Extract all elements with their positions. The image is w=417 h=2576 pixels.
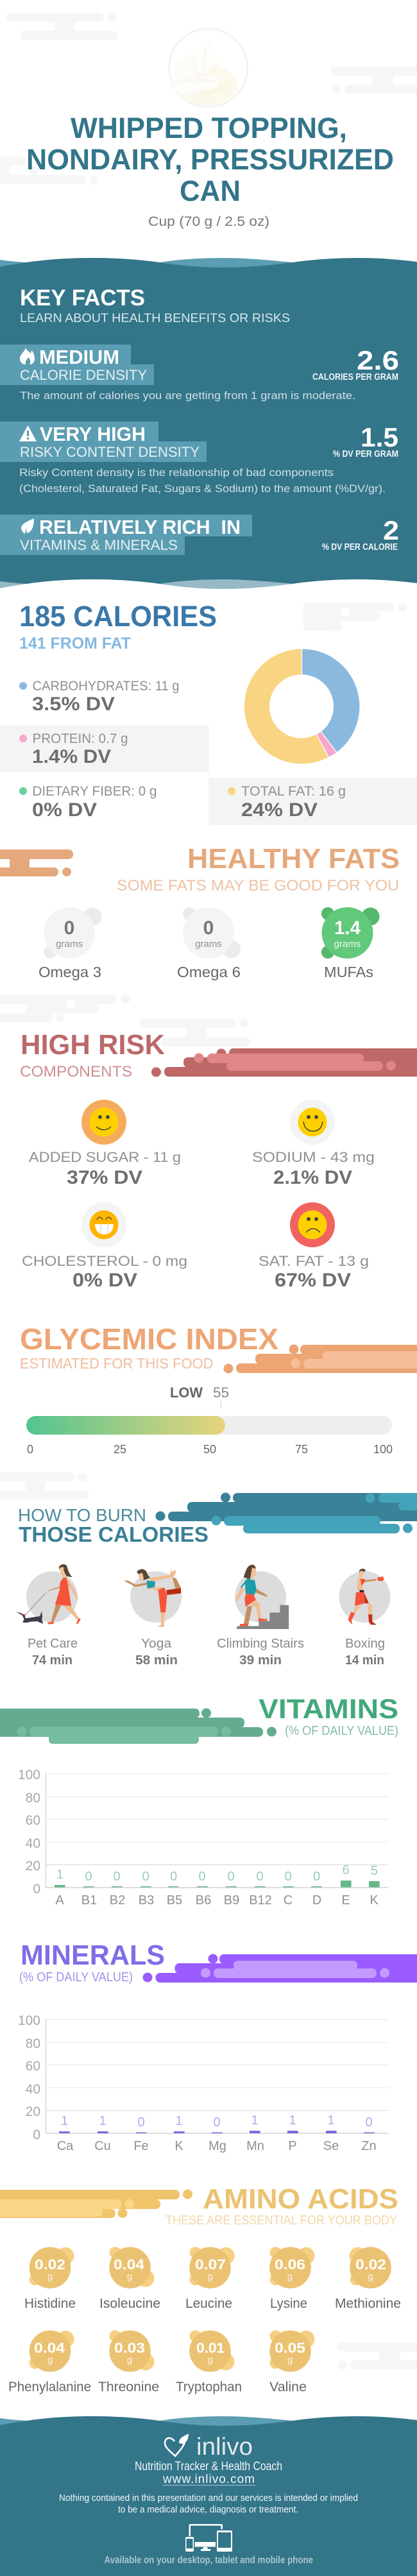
risk: saturated fat xyxy=(259,1202,369,1291)
chart: vitamins: 40 xyxy=(26,1836,40,1851)
chart: vitamins: E xyxy=(341,1893,350,1907)
chart: minerals: 40 xyxy=(26,2082,40,2097)
stat: omega 6 xyxy=(177,907,241,980)
chart: glycemic index gauge xyxy=(26,1385,393,1456)
vitamins heading: VITAMINS xyxy=(259,1694,398,1725)
amino: valine: 0.05 xyxy=(275,2340,305,2356)
chart: vitamins: C xyxy=(284,1893,293,1907)
risk: sodium: 2.1% DV xyxy=(273,1167,352,1188)
fact: risky content density: RISKY CONTENT DENSITY xyxy=(20,444,200,460)
chart: minerals: Fe xyxy=(133,2139,149,2153)
chart: glycemic index gauge: LOW xyxy=(170,1385,203,1401)
chart: minerals: P xyxy=(288,2139,297,2153)
chart: minerals: 1 xyxy=(175,2114,183,2128)
chart: macronutrient donut xyxy=(244,649,360,764)
amino: valine xyxy=(269,2330,314,2394)
serving size: Cup (70 g / 2.5 oz) xyxy=(148,214,269,229)
chart: minerals: 1 xyxy=(327,2113,335,2128)
amino: tryptophan: 0.01 xyxy=(196,2340,225,2356)
chart: vitamins: 80 xyxy=(26,1791,40,1805)
chart: glycemic index gauge: 100 xyxy=(373,1443,393,1456)
legend: carbohydrates: 3.5% DV xyxy=(32,694,115,715)
amino: methionine: g xyxy=(368,2271,373,2282)
chart: minerals: Cu xyxy=(94,2139,111,2153)
fact: calorie density: MEDIUM xyxy=(39,346,119,368)
high risk heading: HIGH RISK xyxy=(21,1029,165,1061)
activity: boxing: Boxing xyxy=(345,1637,385,1651)
activity: climbing stairs xyxy=(217,1565,304,1668)
chart: vitamins: 0 xyxy=(113,1870,121,1884)
amino: threonine: 0.03 xyxy=(114,2340,145,2356)
fact: vitamins and minerals: 2 xyxy=(383,515,399,545)
high risk subheading: COMPONENTS xyxy=(20,1063,132,1080)
fact: calorie density: CALORIES PER GRAM xyxy=(312,372,398,382)
legend: dietary fiber xyxy=(19,784,157,821)
glycemic index subheading: ESTIMATED FOR THIS FOOD xyxy=(20,1355,213,1372)
fact: calorie density: The amount of calories you are getting from 1 gram is moderate. xyxy=(20,389,355,402)
icon: devices xyxy=(185,2524,232,2552)
chart: vitamins: B12 xyxy=(249,1893,272,1907)
key facts heading: KEY FACTS xyxy=(20,286,145,311)
amino: tryptophan xyxy=(176,2330,242,2394)
disclaimer: to be a medical advice, diagnosis or treatment. xyxy=(118,2504,298,2515)
tagline: Nutrition Tracker & Health Coach xyxy=(135,2459,282,2473)
amino: phenylalanine: 0.04 xyxy=(34,2340,65,2356)
amino: threonine: Threonine xyxy=(98,2380,159,2394)
chart: vitamins: 1 xyxy=(56,1868,64,1882)
minerals heading: MINERALS xyxy=(21,1940,165,1971)
chart: minerals: 20 xyxy=(26,2104,40,2119)
stat: omega 3: 0 xyxy=(64,917,74,939)
calories heading: 185 CALORIES xyxy=(19,600,217,633)
title: NONDAIRY, PRESSURIZED xyxy=(26,143,394,176)
amino: phenylalanine: Phenylalanine xyxy=(8,2380,91,2394)
fact: vitamins and minerals: VITAMINS & MINERALS xyxy=(20,537,178,553)
glycemic index heading: GLYCEMIC INDEX xyxy=(20,1322,278,1356)
fact: calorie density: 2.6 xyxy=(357,345,399,375)
amino: leucine: 0.07 xyxy=(195,2256,226,2273)
fact: risky content density: Risky Content density is the relationship of bad components xyxy=(19,466,334,479)
stat: MUFAs: MUFAs xyxy=(324,964,373,980)
icon: woman climbing stairs xyxy=(235,1565,289,1629)
stat: MUFAs xyxy=(321,907,380,980)
activity: pet care: 74 min xyxy=(32,1653,72,1668)
vitamins subheading: (% OF DAILY VALUE) xyxy=(285,1724,398,1738)
amino: leucine: g xyxy=(207,2271,213,2282)
chart: vitamins: 20 xyxy=(26,1859,40,1873)
amino: leucine: Leucine xyxy=(185,2296,232,2311)
chart: minerals xyxy=(18,2013,389,2153)
activity: pet care xyxy=(17,1564,81,1668)
chart: vitamins: B2 xyxy=(110,1893,125,1907)
chart: vitamins: 0 xyxy=(256,1870,264,1884)
amino: phenylalanine xyxy=(8,2330,91,2394)
chart: vitamins: B1 xyxy=(81,1893,97,1907)
chart: minerals: 0 xyxy=(213,2115,221,2129)
chart: minerals: 0 xyxy=(137,2115,145,2129)
website link: www.inlivo.com xyxy=(162,2473,255,2486)
stat: omega 3 xyxy=(38,907,101,980)
amino: isoleucine: 0.04 xyxy=(114,2256,145,2273)
activity: boxing: 14 min xyxy=(345,1653,384,1668)
chart: minerals: Se xyxy=(323,2139,339,2153)
amino: lysine: 0.06 xyxy=(275,2256,305,2273)
legend: carbohydrates: CARBOHYDRATES: 11 g xyxy=(32,679,180,694)
chart: vitamins: 0 xyxy=(227,1870,235,1884)
stat: omega 6: Omega 6 xyxy=(177,964,241,980)
activity: pet care: Pet Care xyxy=(28,1637,78,1651)
minerals subheading: (% OF DAILY VALUE) xyxy=(19,1970,133,1984)
legend: carbohydrates xyxy=(19,679,180,715)
icon: woman in yoga pose xyxy=(124,1569,181,1627)
icon: whipped cream photo xyxy=(169,28,248,107)
amino: valine: Valine xyxy=(269,2380,307,2394)
minerals banner xyxy=(142,1954,417,1983)
fact: calorie density: CALORIE DENSITY xyxy=(20,367,147,383)
chart: vitamins: 0 xyxy=(142,1870,149,1884)
burn calories banner xyxy=(155,1492,417,1533)
risk: added sugar: ADDED SUGAR - 11 g xyxy=(29,1149,181,1165)
chart: vitamins xyxy=(18,1768,389,1907)
fact: risky content density xyxy=(0,422,398,495)
risk: saturated fat: SAT. FAT - 13 g xyxy=(259,1253,369,1269)
stat: MUFAs: grams xyxy=(334,939,361,950)
stat: omega 3: Omega 3 xyxy=(38,964,101,980)
fact: risky content density: VERY HIGH xyxy=(40,423,146,445)
chart: vitamins: 0 xyxy=(170,1870,177,1884)
chart: glycemic index gauge: 0 xyxy=(27,1443,33,1456)
chart: vitamins: 0 xyxy=(284,1870,292,1884)
chart: minerals: 60 xyxy=(26,2059,40,2074)
icon: leaf xyxy=(21,518,34,534)
fact: risky content density: 1.5 xyxy=(361,422,398,452)
chart: vitamins: 0 xyxy=(33,1882,40,1897)
chart: vitamins: 0 xyxy=(198,1870,206,1884)
chart: minerals: 80 xyxy=(26,2036,40,2051)
amino: methionine: Methionine xyxy=(335,2296,401,2311)
fact: calorie density xyxy=(0,345,399,402)
availability note: Available on your desktop, tablet and mobile phone xyxy=(104,2555,313,2566)
stat: omega 3: grams xyxy=(56,939,83,950)
activity: yoga: 58 min xyxy=(135,1653,178,1668)
amino: histidine: g xyxy=(47,2271,53,2282)
chart: vitamins: 5 xyxy=(371,1864,378,1878)
chart: glycemic index gauge: 55 xyxy=(213,1385,229,1401)
high risk banner xyxy=(151,1048,417,1077)
panel: footer xyxy=(0,2416,417,2576)
legend: protein: 1.4% DV xyxy=(32,746,111,767)
vitamins banner xyxy=(0,1708,277,1744)
amino: threonine xyxy=(98,2330,159,2394)
chart: vitamins: 0 xyxy=(313,1870,320,1884)
healthy fats subheading: SOME FATS MAY BE GOOD FOR YOU xyxy=(117,877,399,894)
chart: glycemic index gauge: 75 xyxy=(295,1443,308,1456)
legend: dietary fiber: DIETARY FIBER: 0 g xyxy=(32,784,157,799)
chart: vitamins: K xyxy=(370,1893,379,1907)
amino: tryptophan: g xyxy=(207,2355,213,2366)
legend: protein: PROTEIN: 0.7 g xyxy=(32,731,128,746)
icon: inlivo heart logo xyxy=(165,2434,189,2456)
legend: total fat: 24% DV xyxy=(241,799,318,821)
amino: isoleucine: Isoleucine xyxy=(99,2296,160,2311)
key facts subheading: LEARN ABOUT HEALTH BENEFITS OR RISKS xyxy=(20,311,290,325)
risk: sodium xyxy=(252,1100,375,1188)
activity: climbing stairs: Climbing Stairs xyxy=(217,1637,304,1651)
amino: leucine xyxy=(185,2247,235,2311)
chart: minerals: Mn xyxy=(246,2139,264,2153)
amino: histidine xyxy=(24,2247,76,2311)
chart: vitamins: 0 xyxy=(85,1870,92,1884)
glycemic index banner xyxy=(223,1345,417,1373)
legend: dietary fiber: 0% DV xyxy=(32,799,97,821)
activity: yoga: Yoga xyxy=(141,1637,172,1651)
fact: vitamins and minerals: % DV PER CALORIE xyxy=(322,542,398,552)
burn calories heading line 2: THOSE CALORIES xyxy=(19,1523,208,1546)
legend: protein xyxy=(0,725,209,772)
chart: minerals: 1 xyxy=(61,2114,68,2128)
chart: glycemic index gauge: 50 xyxy=(203,1443,216,1456)
amino: lysine: Lysine xyxy=(270,2296,307,2311)
risk: cholesterol xyxy=(22,1202,187,1291)
icon: woman walking dog xyxy=(17,1564,81,1625)
chart: vitamins: 100 xyxy=(18,1768,40,1782)
chart: vitamins: B5 xyxy=(167,1893,182,1907)
amino: lysine: g xyxy=(287,2271,293,2282)
logo wordmark: inlivo xyxy=(196,2434,253,2461)
risk: cholesterol: CHOLESTEROL - 0 mg xyxy=(22,1253,187,1269)
disclaimer xyxy=(59,2493,358,2515)
calories from fat: 141 FROM FAT xyxy=(19,635,131,653)
amino: phenylalanine: g xyxy=(47,2355,53,2366)
icon: man boxing xyxy=(348,1569,384,1625)
amino: valine: g xyxy=(287,2355,293,2366)
panel: key facts xyxy=(0,258,417,597)
chart: vitamins: A xyxy=(55,1893,64,1907)
title xyxy=(26,112,394,207)
chart: vitamins: B3 xyxy=(139,1893,154,1907)
amino acids subheading: THESE ARE ESSENTIAL FOR YOUR BODY xyxy=(166,2213,397,2228)
activity: yoga xyxy=(124,1569,182,1668)
amino: threonine: g xyxy=(127,2355,132,2366)
chart: glycemic index gauge: 25 xyxy=(114,1443,126,1456)
risk: sodium: SODIUM - 43 mg xyxy=(252,1149,375,1165)
title: WHIPPED TOPPING, xyxy=(71,112,347,144)
amino: methionine xyxy=(335,2247,401,2311)
fact: risky content density: (Cholesterol, Saturated Fat, Sugars & Sodium) to the amount (%DV/gr). xyxy=(19,482,386,495)
chart: minerals: 1 xyxy=(251,2113,259,2128)
chart: vitamins: D xyxy=(312,1893,321,1907)
amino: histidine: Histidine xyxy=(24,2296,76,2311)
amino: isoleucine xyxy=(99,2247,160,2311)
chart: minerals: K xyxy=(174,2139,183,2153)
stat: omega 6: grams xyxy=(195,939,222,950)
risk: added sugar xyxy=(29,1100,181,1188)
amino: tryptophan: Tryptophan xyxy=(176,2380,242,2394)
risk: cholesterol: 0% DV xyxy=(72,1270,137,1291)
stat: MUFAs: 1.4 xyxy=(334,917,361,939)
fact: risky content density: % DV PER GRAM xyxy=(333,449,398,459)
chart: vitamins: B9 xyxy=(224,1893,239,1907)
chart: minerals: 100 xyxy=(18,2013,40,2028)
legend: total fat: TOTAL FAT: 16 g xyxy=(241,784,346,799)
title: CAN xyxy=(180,175,241,207)
risk: added sugar: 37% DV xyxy=(67,1167,142,1188)
activity: boxing xyxy=(339,1569,390,1668)
icon: flame xyxy=(20,348,35,364)
chart: minerals: 0 xyxy=(365,2115,373,2129)
chart: minerals: 1 xyxy=(289,2113,296,2128)
healthy fats banner xyxy=(0,849,73,876)
chart: vitamins: 60 xyxy=(26,1813,40,1828)
amino acids heading: AMINO ACIDS xyxy=(203,2183,398,2215)
activity: climbing stairs: 39 min xyxy=(239,1653,282,1668)
chart: vitamins: 6 xyxy=(342,1863,350,1877)
chart: vitamins: B6 xyxy=(196,1893,211,1907)
amino: methionine: 0.02 xyxy=(355,2256,386,2273)
chart: minerals: Ca xyxy=(57,2139,74,2153)
chart: minerals: 0 xyxy=(33,2128,40,2142)
amino: histidine: 0.02 xyxy=(35,2256,65,2273)
risk: saturated fat: 67% DV xyxy=(275,1270,351,1291)
chart: minerals: 1 xyxy=(99,2114,106,2128)
fact: vitamins and minerals xyxy=(0,515,399,555)
fact: vitamins and minerals: RELATIVELY RICH IN xyxy=(39,516,241,538)
healthy fats heading: HEALTHY FATS xyxy=(187,843,400,874)
amino: isoleucine: g xyxy=(127,2271,132,2282)
burn calories heading line 1: HOW TO BURN xyxy=(18,1505,146,1525)
legend: total fat xyxy=(208,778,417,825)
stat: omega 6: 0 xyxy=(203,917,214,939)
amino: lysine xyxy=(269,2247,314,2311)
disclaimer: Nothing contained in this presentation and our services is intended or implied xyxy=(59,2493,358,2503)
icon: warning triangle xyxy=(19,425,37,441)
amino acids banner xyxy=(0,2189,192,2218)
chart: minerals: Mg xyxy=(208,2139,226,2153)
chart: minerals: Zn xyxy=(361,2139,377,2153)
